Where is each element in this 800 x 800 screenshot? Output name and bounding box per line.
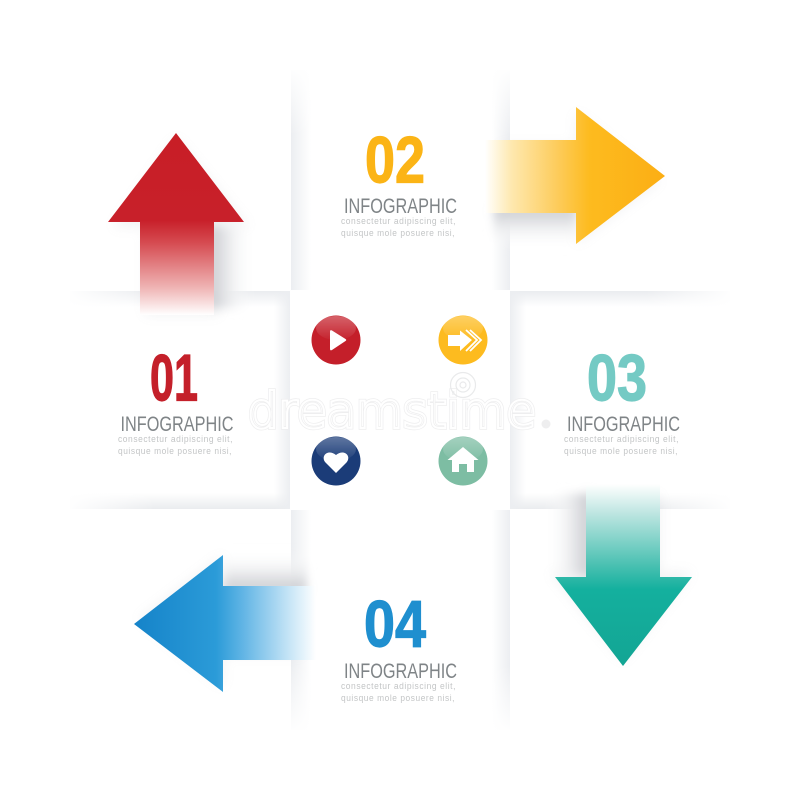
text block: 03: INFOGRAPHIC [567,412,680,436]
text block: 02: 02 [365,122,425,196]
icon: home button [438,436,488,486]
icon: heart button [312,436,360,486]
icon: arrow button [438,316,488,364]
text block: 02: quisque mole posuere nisi, [341,228,455,238]
text block: 01: quisque mole posuere nisi, [118,446,232,456]
arrow: red up [108,133,252,315]
watermark: dreamstime [248,382,536,440]
text block: 04: 04 [364,586,426,660]
arrow: yellow right [485,107,665,247]
text block: 04: quisque mole posuere nisi, [341,693,455,703]
text block: 04: consectetur adipiscing elit, [341,681,456,691]
text block: 03: 03 [587,340,647,414]
text block: 01: consectetur adipiscing elit, [118,434,233,444]
text block: 03 [564,340,680,456]
text block: 04 [341,586,457,703]
text block: 01: 01 [150,340,198,414]
text block: 03: consectetur adipiscing elit, [564,434,679,444]
text block: 01 [118,340,234,456]
text block: 02: INFOGRAPHIC [344,194,457,218]
text block: 02 [341,122,457,238]
arrow: blue left [134,552,316,692]
text block: 04: INFOGRAPHIC [344,659,457,683]
text block: 02: consectetur adipiscing elit, [341,216,456,226]
icon: play button [312,316,360,364]
text block: 03: quisque mole posuere nisi, [564,446,678,456]
watermark: dreamstime [248,382,536,440]
text block: 01: INFOGRAPHIC [120,412,234,436]
panel: paper grid folds [65,65,735,735]
arrow: green down [548,484,692,666]
